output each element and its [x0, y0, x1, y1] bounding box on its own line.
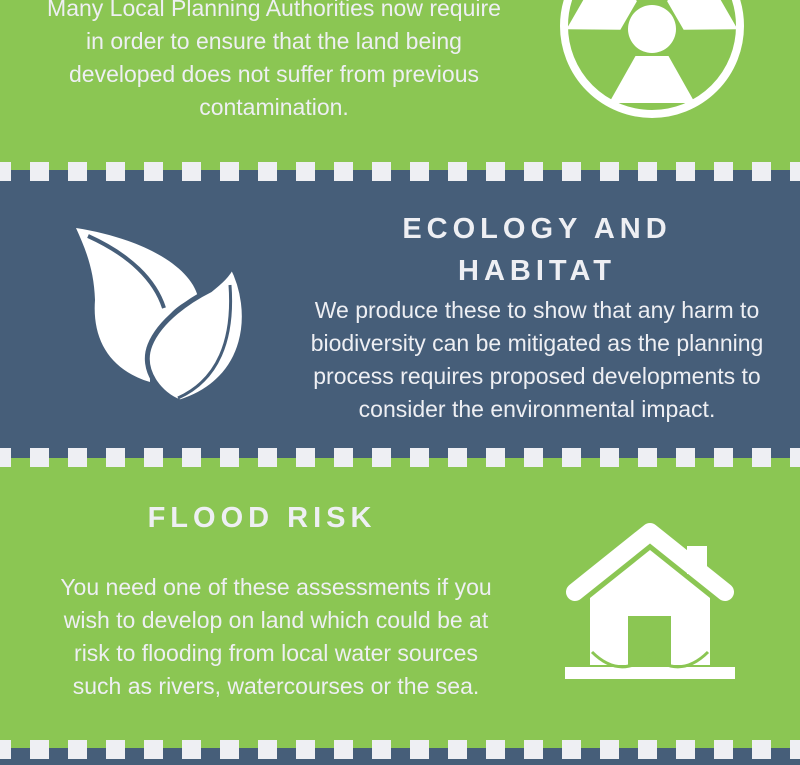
heading: ecology and habitat: ECOLOGY AND: [402, 213, 672, 245]
heading: ecology and habitat: [402, 213, 672, 287]
heading: flood risk: FLOOD RISK: [148, 502, 376, 534]
icon: radiation: [560, 0, 744, 118]
text: ecology body: consider the environmental impact.: [359, 396, 715, 422]
text: ecology body: We produce these to show that any harm to: [315, 297, 759, 323]
text: flood body: wish to develop on land which could be at: [64, 607, 488, 633]
text: contamination intro: in order to ensure that the land being: [86, 28, 462, 54]
icon: flooded house: [565, 523, 735, 679]
text: ecology body: process requires proposed developments to: [313, 363, 761, 389]
heading: ecology and habitat: HABITAT: [458, 255, 616, 287]
text: contamination intro: [47, 0, 501, 120]
text: ecology body: [311, 297, 763, 422]
text: contamination intro: developed does not suffer from previous: [69, 61, 479, 87]
text: contamination intro: contamination.: [199, 94, 349, 120]
icon: leaves: [76, 228, 242, 400]
text: flood body: You need one of these assessments if you: [60, 574, 492, 600]
text: ecology body: biodiversity can be mitigated as the planning: [311, 330, 763, 356]
text: flood body: [60, 574, 492, 699]
text: flood body: risk to flooding from local water sources: [74, 640, 478, 666]
text: flood body: such as rivers, watercourses or the sea.: [73, 673, 479, 699]
